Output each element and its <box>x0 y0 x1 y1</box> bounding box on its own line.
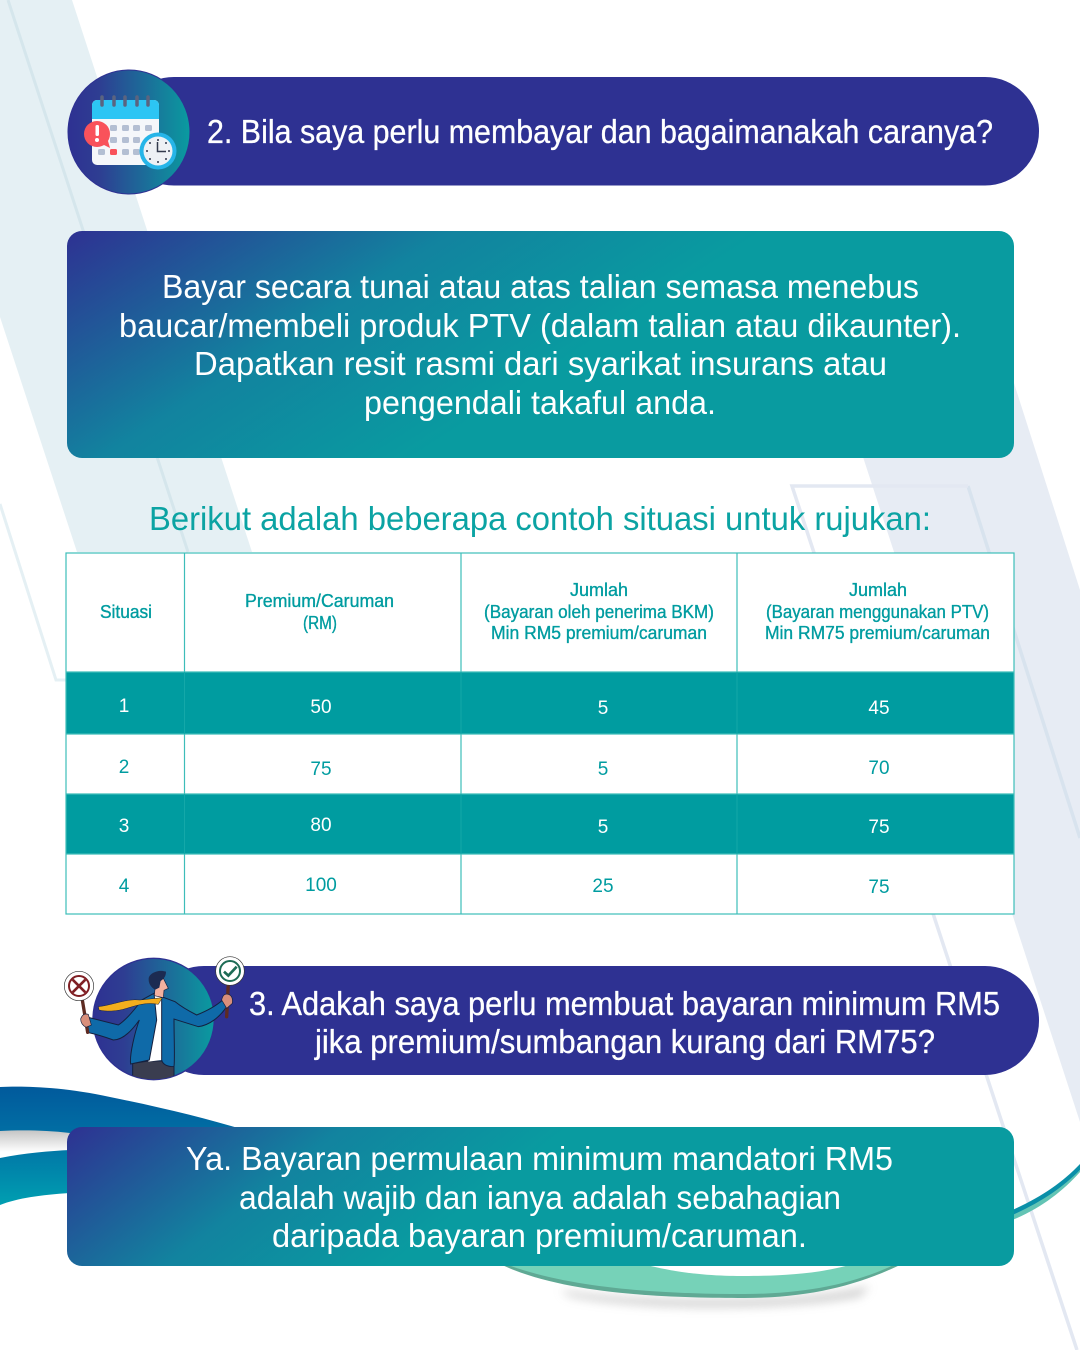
payment text: Dapatkan resit rasmi dari syarikat insurans atau <box>194 345 887 382</box>
table header row: Situasi <box>100 602 152 622</box>
decorative swoosh: bottom green <box>496 1262 906 1306</box>
table row 2: 75 <box>310 759 332 780</box>
table header row: Min RM5 premium/caruman <box>491 623 707 643</box>
header pill: question 2 <box>120 77 1039 186</box>
question 3 text: jika premium/sumbangan kurang dari RM75? <box>314 1023 935 1060</box>
table header row <box>100 580 990 643</box>
decorative swoosh: top left <box>0 1087 245 1205</box>
icon: man holding cross and check signs <box>64 957 244 1080</box>
table row 2: 70 <box>868 758 890 779</box>
header pill: question 3 <box>150 966 1039 1075</box>
table row 1: 1 <box>119 696 129 717</box>
table row 2: 5 <box>598 759 608 780</box>
table: situations <box>66 553 1014 914</box>
table row 4: 25 <box>592 876 614 897</box>
pill background <box>150 966 1039 1075</box>
table header row: Premium/Caruman <box>245 591 394 611</box>
table header row: Jumlah <box>570 580 628 600</box>
table row 3: 75 <box>868 817 890 838</box>
icon: calendar with clock <box>68 70 190 194</box>
decorative swoosh: right <box>1010 1164 1080 1221</box>
pill background <box>120 77 1039 186</box>
answer 3 text: daripada bayaran premium/caruman. <box>272 1217 807 1254</box>
table row 1 <box>119 696 890 719</box>
table row 1: 5 <box>598 698 608 719</box>
table header row: (Bayaran oleh penerima BKM) <box>484 602 714 622</box>
table row 1: 45 <box>868 698 890 719</box>
table row 4: 100 <box>305 875 337 896</box>
table row 4: 75 <box>868 877 890 898</box>
question 3 text <box>249 985 1000 1060</box>
answer 3 text: adalah wajib dan ianya adalah sebahagian <box>239 1179 841 1216</box>
payment text <box>119 268 961 421</box>
payment text: Bayar secara tunai atau atas talian semasa menebus <box>162 268 919 305</box>
table row 2: 2 <box>119 757 129 778</box>
table row 2 <box>119 757 890 780</box>
table header row: (RM) <box>303 613 337 633</box>
payment text: baucar/membeli produk PTV (dalam talian atau dikaunter). <box>119 307 961 344</box>
payment text: pengendali takaful anda. <box>364 384 716 421</box>
question 2 text: 2. Bila saya perlu membayar dan bagaimanakah caranya? <box>207 113 993 150</box>
heading: table intro: Berikut adalah beberapa contoh situasi untuk rujukan: <box>149 500 931 537</box>
answer 3 text: Ya. Bayaran permulaan minimum mandatori RM5 <box>186 1140 893 1177</box>
panel: answer 3 <box>67 1127 1014 1266</box>
panel: payment answer <box>67 231 1014 458</box>
table row 4: 4 <box>119 876 130 897</box>
table row 1: 50 <box>310 697 332 718</box>
table row 3: 80 <box>310 815 332 836</box>
table header row: (Bayaran menggunakan PTV) <box>766 602 989 622</box>
answer 3 text <box>186 1140 893 1254</box>
table row 3 <box>119 815 890 838</box>
table row 3: 5 <box>598 817 608 838</box>
table row 3: 3 <box>119 816 129 837</box>
question 3 text: 3. Adakah saya perlu membuat bayaran minimum RM5 <box>249 985 1000 1022</box>
table header row: Jumlah <box>849 580 907 600</box>
table header row: Min RM75 premium/caruman <box>765 623 990 643</box>
table row 4 <box>119 875 890 898</box>
